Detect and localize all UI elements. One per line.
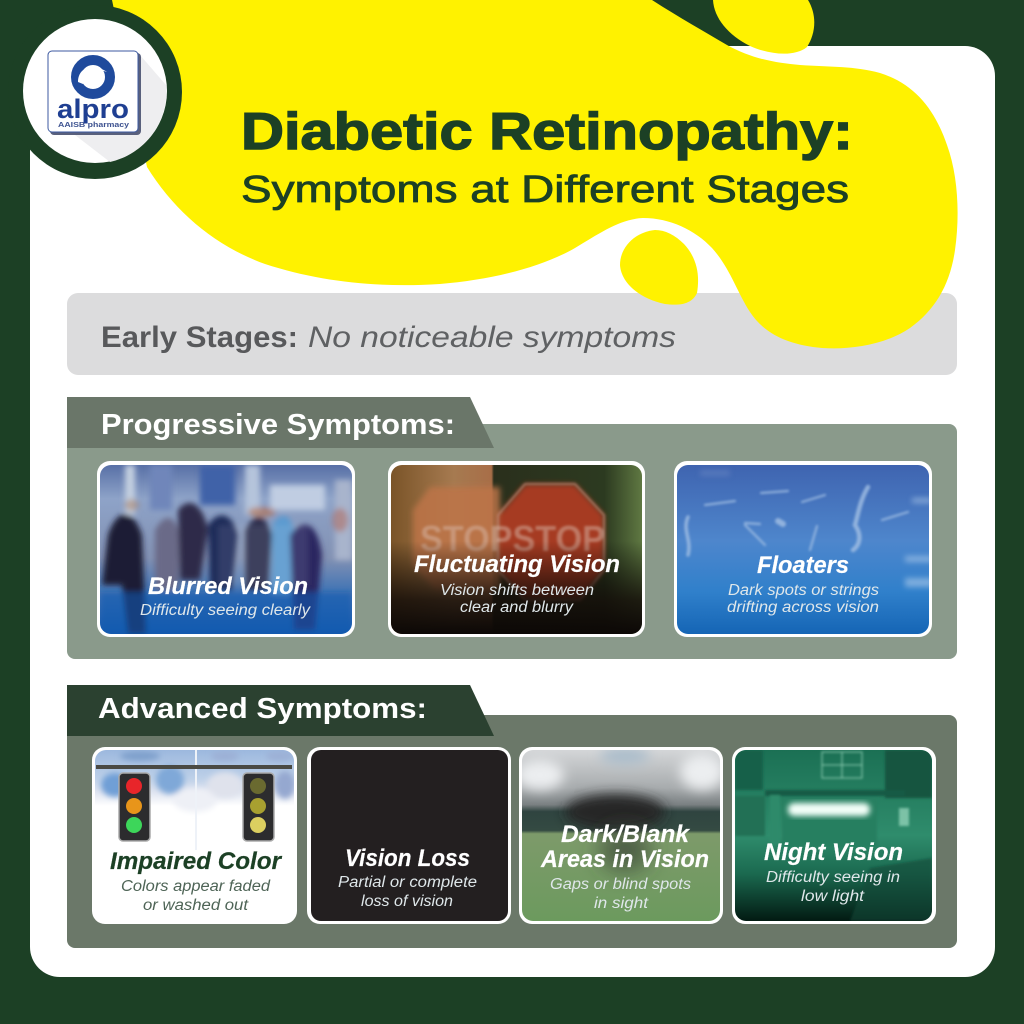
early stages label: Early Stages: bbox=[101, 321, 298, 354]
card description bbox=[338, 874, 477, 910]
card description: Difficulty seeing in bbox=[766, 869, 900, 886]
card description: in sight bbox=[594, 895, 649, 912]
card description: low light bbox=[801, 888, 865, 905]
card: fluctuating vision: STOPSTOP bbox=[420, 518, 605, 559]
yellow header blob bbox=[112, 0, 958, 348]
card description: Partial or complete bbox=[338, 874, 477, 891]
card description: or washed out bbox=[143, 897, 249, 914]
logo ring icon bbox=[76, 60, 110, 94]
card: fluctuating vision bbox=[388, 461, 645, 637]
card description: loss of vision bbox=[361, 893, 453, 910]
card description bbox=[121, 878, 271, 914]
icon: traffic light, full colour bbox=[119, 773, 150, 841]
card description: clear and blurry bbox=[460, 599, 574, 616]
logo wordmark: alpro bbox=[57, 94, 129, 124]
card: dark or blank areas bbox=[516, 747, 724, 924]
card title: Fluctuating Vision bbox=[414, 551, 620, 578]
card title bbox=[540, 821, 709, 873]
card title: Floaters bbox=[757, 552, 849, 579]
progressive heading: Progressive Symptoms: bbox=[101, 409, 455, 441]
advanced heading: Advanced Symptoms: bbox=[98, 693, 427, 725]
card: blurred vision bbox=[97, 461, 355, 637]
card description: Colors appear faded bbox=[121, 878, 271, 895]
card title: Night Vision bbox=[764, 839, 903, 866]
card: night vision bbox=[732, 747, 936, 924]
card: impaired color bbox=[92, 747, 297, 924]
card description bbox=[440, 582, 594, 616]
early stages panel bbox=[67, 293, 957, 375]
card description: Gaps or blind spots bbox=[550, 876, 691, 893]
subtitle: Symptoms at Different Stages bbox=[241, 169, 849, 211]
advanced tab bbox=[67, 685, 494, 736]
card description: Vision shifts between bbox=[440, 582, 594, 599]
card description: drifting across vision bbox=[727, 599, 879, 616]
early stages description: No noticeable symptoms bbox=[308, 321, 676, 354]
card description bbox=[727, 582, 879, 616]
card description bbox=[550, 876, 691, 912]
card description bbox=[766, 869, 900, 905]
card title: Blurred Vision bbox=[148, 573, 308, 600]
card title: Impaired Color bbox=[110, 848, 283, 875]
panel: progressive symptoms bbox=[67, 397, 957, 659]
icon: traffic light, faded colour bbox=[243, 773, 274, 841]
card description: Difficulty seeing clearly bbox=[140, 602, 311, 619]
card title: Vision Loss bbox=[345, 845, 470, 872]
card title: Areas in Vision bbox=[540, 846, 709, 873]
card title: Dark/Blank bbox=[561, 821, 691, 848]
logo badge bbox=[8, 5, 182, 179]
panel: advanced symptoms bbox=[67, 685, 957, 948]
title: Diabetic Retinopathy: bbox=[241, 103, 853, 161]
progressive tab bbox=[67, 397, 494, 448]
card description: Dark spots or strings bbox=[728, 582, 879, 599]
card: vision loss bbox=[307, 747, 511, 924]
card: floaters bbox=[674, 461, 933, 637]
logo tagline: AAISB pharmacy bbox=[58, 122, 129, 129]
